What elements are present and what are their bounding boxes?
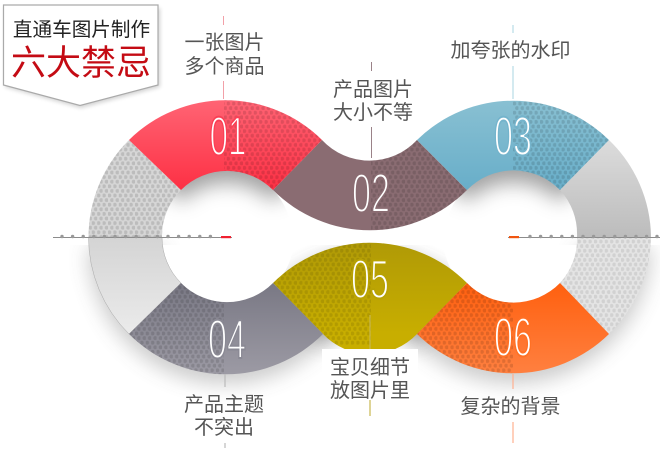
label 03 with leader line	[450, 25, 570, 99]
segment 02	[273, 140, 467, 230]
number 05: 05	[351, 249, 389, 310]
label 05 with white box and leader line: 宝贝细节	[330, 356, 410, 379]
segment 01	[129, 100, 322, 190]
label 01 with leader line: 一张图片	[184, 31, 264, 54]
number 06: 06	[494, 307, 532, 368]
label 01 with leader line: 多个商品	[184, 55, 264, 78]
segment: upper-right grey	[560, 140, 651, 237]
segment: upper-left grey dotted	[88, 140, 181, 237]
segment 05	[273, 243, 467, 354]
segment: lower-left grey	[88, 237, 181, 334]
label 06 with leader line: 复杂的背景	[460, 395, 560, 418]
label 01 with leader line	[184, 16, 264, 99]
tag body	[4, 5, 158, 106]
right axis with ticks	[508, 235, 660, 238]
label 03 with leader line: 加夸张的水印	[450, 39, 570, 62]
label 02 with leader line: 产品图片	[333, 78, 413, 101]
label 05 with white box and leader line	[322, 315, 418, 416]
segment 03	[417, 101, 609, 190]
title line two: 六大禁忌	[11, 44, 151, 83]
label 04 with leader line: 产品主题	[184, 393, 264, 416]
label 06 with leader line	[460, 374, 560, 443]
segment 06	[417, 283, 609, 373]
label 02 with leader line: 大小不等	[333, 101, 413, 124]
number 04: 04	[208, 309, 246, 370]
number 02: 02	[352, 163, 390, 224]
soft drop shadows of the ribbon	[80, 170, 659, 393]
segment 04	[129, 283, 323, 374]
tag shadow	[5, 8, 160, 108]
label 02 with leader line	[333, 62, 413, 158]
label 04 with leader line: 不突出	[194, 416, 254, 439]
title tag	[4, 5, 160, 108]
segment: lower-right grey dotted	[560, 237, 651, 334]
label 05 with white box and leader line: 放图片里	[330, 379, 410, 402]
number 01: 01	[210, 105, 246, 167]
number 03: 03	[494, 106, 532, 167]
title line one: 直通车图片制作	[13, 19, 150, 41]
label 04 with leader line	[184, 374, 264, 448]
left axis with ticks	[53, 235, 232, 238]
